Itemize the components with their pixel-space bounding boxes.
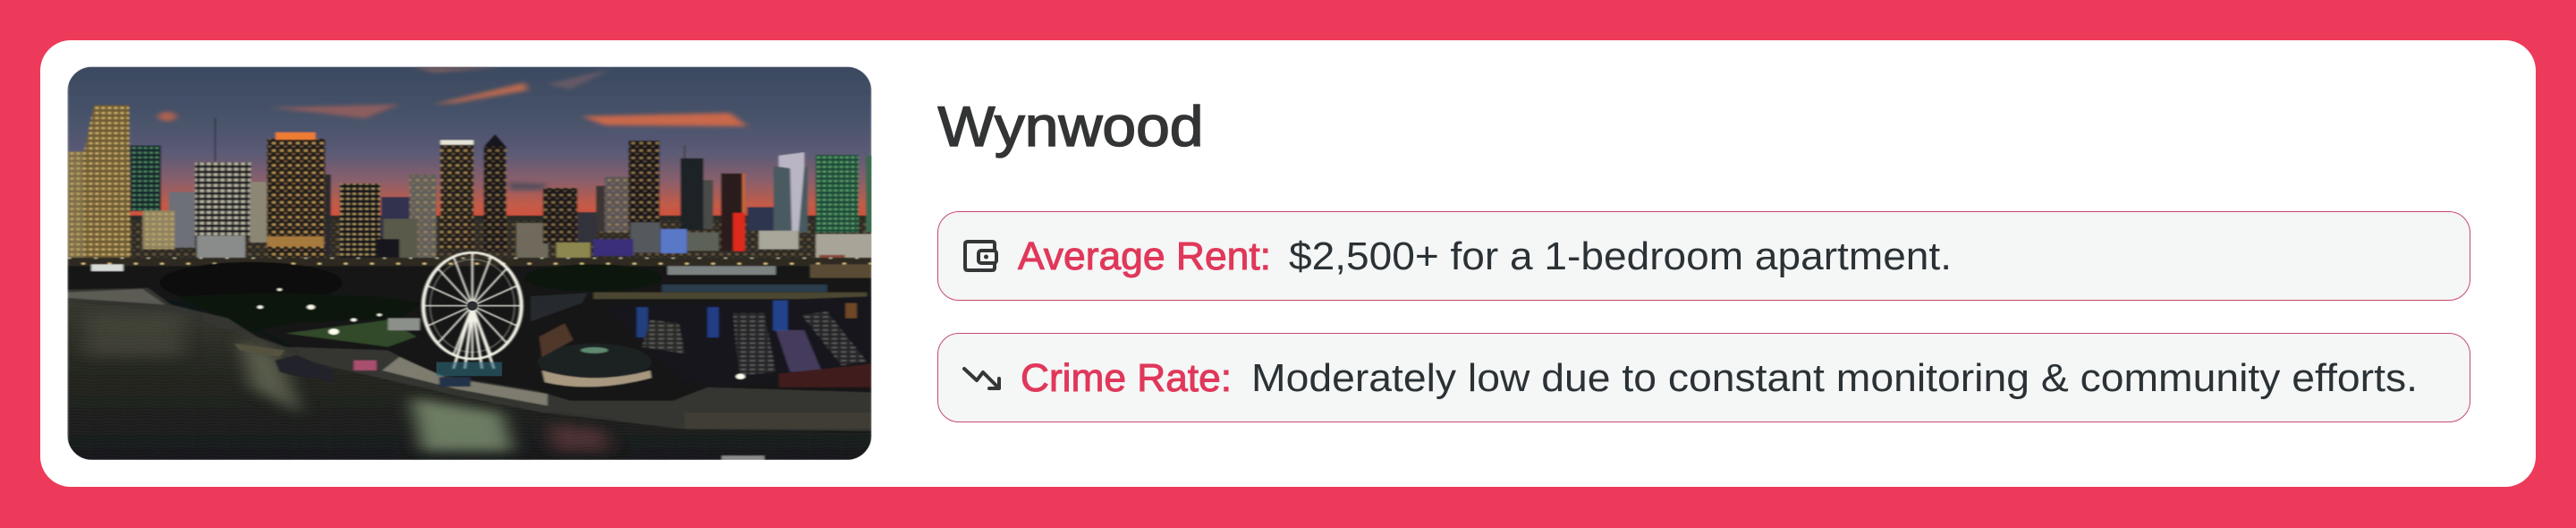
icon: wallet (964, 242, 996, 270)
heading: Wynwood: Wynwood (937, 96, 1204, 158)
water (67, 302, 871, 460)
pavilion (538, 344, 651, 378)
photo: Miami skyline at dusk with ferris wheel and marina (67, 66, 871, 460)
pier (530, 293, 588, 321)
promenade (67, 288, 871, 431)
icon: ferris wheel (423, 252, 521, 369)
parkland (177, 293, 422, 332)
text: rent value: $2,500+ for a 1-bedroom apartment. (1288, 234, 1952, 277)
buildings (67, 151, 86, 260)
info row: average rent (937, 211, 2470, 301)
info row: crime rate (937, 333, 2470, 422)
boats (275, 355, 334, 382)
sky (67, 67, 871, 225)
label: Average Rent: Average Rent: (1018, 234, 1270, 277)
label: Crime Rate: Crime Rate: (1020, 356, 1231, 399)
icon: trending down arrow (964, 369, 998, 388)
ground and trees (67, 266, 871, 438)
text: crime value: Moderately low due to constant monitoring & community efforts. (1250, 356, 2417, 399)
marina water (647, 296, 871, 363)
shoreline lights (67, 258, 871, 268)
